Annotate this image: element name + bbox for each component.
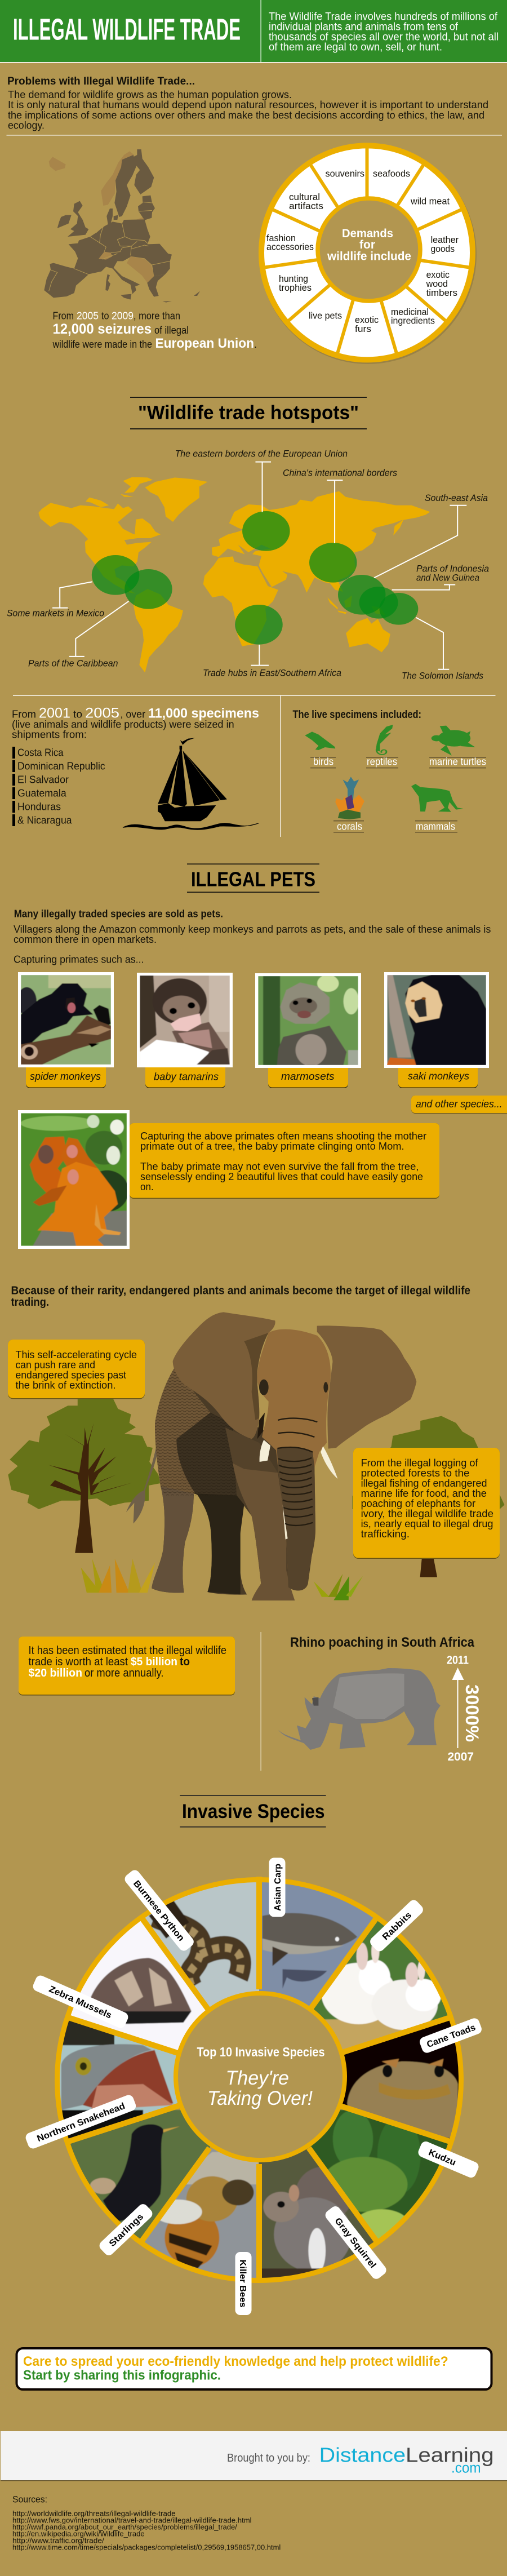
callout: trade worth — [19, 1637, 235, 1695]
sources: http://www.traffic.org/trade/ — [12, 2537, 104, 2545]
EU seizures statistic: 12,000 seizures — [53, 321, 152, 337]
hotspot circles — [92, 511, 418, 645]
wheel segment labels: seafoods — [373, 169, 410, 179]
callout: trade worth: or more annually. — [84, 1667, 163, 1679]
wheel spokes and rings — [57, 1877, 461, 2282]
hotspot labels: Some markets in Mexico — [7, 608, 104, 619]
sources: http://worldwildlife.org/threats/illegal-wildlife-trade — [12, 2510, 176, 2518]
call to action: Care to spread your eco-friendly knowledge and help protect wildlife? — [23, 2354, 448, 2369]
label: Killer Bees — [235, 2252, 251, 2315]
live specimens heading: The live specimens included: — [293, 709, 421, 721]
problems paragraph: the implications of some actions over others and make the best decisions according to ethics, the law, and — [8, 109, 484, 121]
EU seizures statistic: , more than — [134, 311, 180, 322]
increase arrow: 2007 — [447, 1750, 474, 1763]
panel: rhino poaching — [278, 1635, 482, 1763]
hotspot labels: South-east Asia — [425, 493, 488, 503]
EU seizures statistic: . — [254, 339, 257, 350]
shipments statement — [12, 705, 259, 741]
callout: trade worth: It has been estimated that the illegal wildlife — [28, 1644, 226, 1657]
intro text: The Wildlife Trade involves hundreds of millions of — [269, 11, 498, 23]
wheel centre label — [327, 227, 411, 263]
EU seizures statistic: to — [101, 311, 109, 322]
logo: DistanceLearning.com: Distance — [319, 2444, 406, 2467]
country list: Honduras — [17, 801, 61, 813]
callout: capturing primates — [130, 1123, 439, 1199]
primate card: spider monkeys: spider monkeys — [30, 1071, 101, 1082]
header banner — [0, 0, 507, 63]
callout: capturing primates: The baby primate may not even survive the fall from the tree, — [140, 1161, 419, 1172]
problems paragraph — [8, 89, 488, 131]
wheel segment labels: wild meat — [410, 196, 450, 207]
icon: coral — [335, 777, 364, 819]
segment photo: rabbits — [313, 1921, 447, 2049]
country list: & Nicaragua — [17, 815, 72, 826]
callout: self-accelerating cycle: the brink of extinction. — [16, 1380, 116, 1391]
specimen labels — [310, 756, 486, 832]
illustration: right tree — [353, 1416, 504, 1577]
increase arrow — [447, 1654, 482, 1763]
icon: sailing ship — [123, 738, 259, 830]
wheel segment labels — [266, 169, 459, 334]
specimen labels: marine turtles — [429, 756, 486, 768]
intro text: individual plants and animals from tens of — [269, 21, 459, 33]
callout: capturing primates: senselessly ending 2 beautiful lives that could have easily gone — [140, 1171, 423, 1182]
shipments statement: shipments from: — [12, 729, 87, 741]
heading: invasive species: Invasive Species — [182, 1801, 324, 1823]
specimen labels: mammals — [416, 821, 455, 832]
shipments statement: From — [12, 708, 36, 720]
hotspot labels: Trade hubs in East/Southern Africa — [203, 668, 341, 679]
logo: DistanceLearning.com: Learning — [406, 2444, 494, 2467]
wheel segment labels: ingredients — [391, 316, 435, 326]
EU seizures statistic: 2005 — [77, 311, 99, 322]
wheel segment labels: live pets — [309, 310, 342, 321]
segment photo: northern snakehead — [57, 2019, 177, 2142]
problems paragraph: The demand for wildlife grows as the human population grows. — [8, 89, 292, 100]
icon: bird — [305, 731, 335, 750]
country list: Costa Rica — [17, 747, 64, 759]
callout: illegal logging, fishing and poaching: is, nearly equal to illegal drug — [361, 1518, 493, 1529]
title: ILLEGAL WILDLIFE TRADE — [13, 12, 241, 46]
sponsor band — [1, 2431, 507, 2481]
callout: illegal logging, fishing and poaching: protected forests to the — [361, 1467, 470, 1479]
shipments statement: 11,000 specimens — [148, 706, 259, 721]
pets introduction: Capturing primates such as... — [14, 954, 144, 965]
callout: trade worth: $5 billion — [131, 1656, 177, 1668]
primate card: saki monkeys — [384, 972, 489, 1088]
callout: self-accelerating cycle: endangered species past — [16, 1369, 126, 1381]
heading: problems: Problems with Illegal Wildlife Trade... — [7, 76, 195, 87]
EU seizures statistic: wildlife were made in the — [52, 339, 152, 350]
logo: DistanceLearning.com — [319, 2444, 494, 2476]
illustration: elephant — [126, 1312, 416, 1600]
shipments statement: 2005 — [85, 705, 119, 721]
illustration: grass right — [314, 1574, 363, 1600]
pets introduction — [14, 908, 491, 965]
panel: seizure shipments — [12, 705, 259, 830]
wheel centre label: for — [359, 238, 375, 251]
segment photo: killer bees — [143, 2149, 258, 2285]
label: Cane Toads — [418, 2017, 483, 2054]
problems paragraph: ecology. — [8, 119, 45, 131]
primate card: baby tamarins — [137, 973, 233, 1088]
callout: capturing primates: Capturing the above primates often means shooting the mother — [140, 1130, 426, 1142]
photo: golden lion tamarins — [18, 1110, 130, 1249]
heading: wildlife trade hotspots: "Wildlife trade hotspots" — [138, 402, 359, 423]
specimen labels: birds — [313, 756, 333, 768]
segment photo: gray squirrel — [258, 2149, 379, 2285]
wheel segment labels: timbers — [426, 287, 457, 298]
callout: illegal logging, fishing and poaching — [353, 1448, 500, 1559]
wheel segment labels: hunting — [279, 273, 308, 284]
hotspot labels: Parts of the Caribbean — [28, 658, 118, 669]
country list — [12, 747, 105, 826]
label: Northern Snakehead: Northern Snakehead — [35, 2101, 126, 2144]
icon: reptile — [376, 725, 393, 755]
callout: trade worth: to — [180, 1656, 190, 1668]
label: Starlings — [97, 2202, 154, 2258]
intro text: of them are legal to own, sell, or hunt. — [269, 41, 442, 53]
illustration: rhino — [278, 1668, 441, 1750]
sources: http://wwf.panda.org/about_our_earth/species/problems/illegal_trade/ — [12, 2524, 237, 2531]
segment photo: Burmese python — [145, 1882, 259, 2007]
call to action: Start by sharing this infographic. — [23, 2368, 221, 2383]
problems paragraph: It is only natural that humans would depend upon natural resources, however it is important to understand — [8, 99, 488, 110]
intro text: thousands of species all over the world, but not all — [269, 31, 499, 43]
callout: self-accelerating cycle: This self-accelerating cycle — [16, 1349, 137, 1360]
EU seizures statistic — [52, 311, 257, 351]
label: Killer Bees: Killer Bees — [238, 2260, 247, 2308]
segment photo: zebra mussels — [71, 1921, 205, 2050]
wheel segment labels: exotic — [355, 314, 379, 325]
callout: trade worth: $20 billion — [28, 1667, 82, 1679]
logo: DistanceLearning.com: .com — [451, 2459, 481, 2476]
specimen labels: reptiles — [367, 756, 397, 768]
wheel centre text: Taking Over! — [207, 2087, 313, 2109]
pets introduction: common there in open markets. — [14, 934, 157, 945]
increase arrow: 3000% — [462, 1684, 482, 1742]
wheel centre text — [197, 2045, 324, 2109]
primate card: marmosets — [255, 973, 361, 1088]
wheel segment labels: furs — [355, 323, 371, 334]
shipments statement: to — [73, 708, 82, 720]
wheel segment labels: trophies — [279, 282, 312, 293]
label: Asian Carp: Asian Carp — [273, 1864, 283, 1911]
callout: trade worth: trade is worth at least — [28, 1656, 128, 1668]
shipments statement: 2001 — [39, 705, 70, 721]
segment photo: kudzu — [310, 2110, 453, 2240]
country list: Dominican Republic — [17, 761, 105, 772]
primate card: baby tamarins: baby tamarins — [154, 1071, 219, 1082]
label: Kudzu: Kudzu — [427, 2148, 457, 2168]
wheel segment labels: medicinal — [391, 307, 429, 317]
callout: illegal logging, fishing and poaching: trafficking. — [361, 1528, 410, 1540]
wheel segment labels: goods — [431, 243, 455, 254]
label: Zebra Mussels: Zebra Mussels — [47, 1984, 113, 2020]
shipments statement: , over — [121, 708, 145, 720]
wheel segment labels: fashion — [266, 233, 296, 243]
sources: http://www.time.com/time/specials/packages/completelist/0,29569,1958657,00.html — [12, 2544, 281, 2552]
callout: illegal logging, fishing and poaching: ivory, the illegal wildlife trade — [361, 1508, 493, 1519]
hotspot labels: The Solomon Islands — [402, 670, 483, 681]
label: Rabbits: Rabbits — [381, 1910, 413, 1942]
endangered species statement: Because of their rarity, endangered plants and animals become the target of illegal wildlife — [11, 1285, 470, 1297]
shipments statement: (live animals and wildlife products) were seized in — [12, 719, 234, 730]
wheel segment labels: cultural — [289, 192, 320, 202]
callout leader lines — [52, 462, 466, 670]
wheel segment labels: exotic — [426, 269, 450, 280]
sponsor band: Brought to you by: — [227, 2452, 310, 2464]
sources — [12, 2494, 281, 2552]
segment photo: Asian carp — [259, 1882, 373, 2006]
label: Asian Carp — [269, 1857, 285, 1917]
wheel segment labels: artifacts — [289, 201, 323, 211]
callout: self-accelerating cycle: can push rare and — [16, 1359, 95, 1371]
wheel segment labels: accessories — [266, 242, 314, 252]
wheel centre text: Top 10 Invasive Species — [197, 2045, 324, 2059]
hotspot labels: China's international borders — [283, 468, 397, 478]
primate card: marmosets: marmosets — [281, 1071, 335, 1082]
tag: other species: and other species... — [416, 1098, 502, 1110]
illustration: left tree — [8, 1399, 160, 1553]
EU seizures statistic: From — [53, 311, 74, 322]
sources: http://www.fws.gov/international/travel-and-trade/illegal-wildlife-trade.html — [12, 2517, 252, 2525]
icon: marine turtle — [432, 726, 475, 756]
hotspot labels — [7, 449, 489, 681]
wheel centre text: They're — [225, 2067, 289, 2089]
wheel centre label: wildlife include — [327, 250, 411, 263]
label: Kudzu — [417, 2140, 480, 2179]
callout: illegal logging, fishing and poaching: marine life for food, and the — [361, 1488, 487, 1499]
country list: El Salvador — [17, 774, 69, 786]
wheel centre label: Demands — [342, 227, 393, 240]
label: Rabbits — [368, 1898, 425, 1953]
map: world hotspots — [38, 477, 430, 672]
chart: top 10 invasive species wheel — [24, 1857, 483, 2315]
primate card: spider monkeys — [17, 972, 114, 1088]
tag: other species — [411, 1096, 507, 1114]
specimen labels: corals — [337, 821, 362, 832]
endangered species statement — [11, 1285, 470, 1309]
callout: illegal logging, fishing and poaching: From the illegal logging of — [361, 1457, 478, 1469]
callout: capturing primates: primate out of a tree, the baby primate clinging onto Mom. — [140, 1141, 404, 1152]
label: Cane Toads: Cane Toads — [425, 2023, 477, 2050]
increase arrow: 2011 — [447, 1654, 469, 1667]
endangered species statement: trading. — [11, 1296, 49, 1309]
hotspot labels: The eastern borders of the European Union — [175, 449, 348, 459]
callout: illegal logging, fishing and poaching: illegal fishing of endangered — [361, 1478, 487, 1489]
illustration: grass left — [81, 1559, 155, 1593]
wheel segment labels: souvenirs — [326, 169, 364, 179]
segment photo: starlings — [68, 2110, 212, 2246]
label: Gray Squirrel: Gray Squirrel — [332, 2216, 377, 2270]
map: European Union — [44, 149, 200, 303]
pets introduction: Many illegally traded species are sold as pets. — [14, 908, 223, 920]
rhino heading: Rhino poaching in South Africa — [290, 1635, 475, 1650]
primate card: saki monkeys: saki monkeys — [408, 1071, 469, 1082]
country list: Guatemala — [17, 788, 67, 799]
pets introduction: Villagers along the Amazon commonly keep monkeys and parrots as pets, and the sale of these animals is — [14, 924, 491, 935]
label: Starlings: Starlings — [108, 2212, 145, 2249]
label: Gray Squirrel — [323, 2204, 388, 2281]
EU seizures statistic: of illegal — [154, 325, 189, 336]
segment photo: cane toads — [341, 2019, 462, 2142]
world landmasses — [38, 477, 430, 672]
icon: mammal — [411, 784, 464, 812]
sources: Sources: — [12, 2494, 47, 2505]
label: Burmese Python — [123, 1868, 195, 1953]
intro text — [269, 11, 499, 53]
EU seizures statistic: 2009 — [112, 311, 134, 322]
EU seizures statistic: European Union — [155, 336, 254, 351]
callout: capturing primates: on. — [140, 1181, 154, 1192]
chart: demands for wildlife wheel — [259, 144, 477, 364]
panel: live specimens — [293, 709, 486, 832]
heading: illegal pets: ILLEGAL PETS — [191, 868, 315, 891]
sources: http://en.wikipedia.org/wiki/Wildlife_trade — [12, 2530, 145, 2538]
label: Northern Snakehead — [24, 2094, 137, 2150]
wheel segment labels: leather — [431, 234, 459, 245]
callout: self-accelerating cycle — [8, 1340, 145, 1399]
hotspot labels: and New Guinea — [416, 572, 479, 583]
call to action — [17, 2348, 491, 2389]
label: Burmese Python: Burmese Python — [131, 1879, 186, 1943]
hotspot labels: Parts of Indonesia — [416, 564, 489, 574]
callout: illegal logging, fishing and poaching: poaching of elephants for — [361, 1498, 475, 1509]
label: Zebra Mussels — [32, 1974, 130, 2029]
wheel segment labels: wood — [426, 278, 448, 289]
